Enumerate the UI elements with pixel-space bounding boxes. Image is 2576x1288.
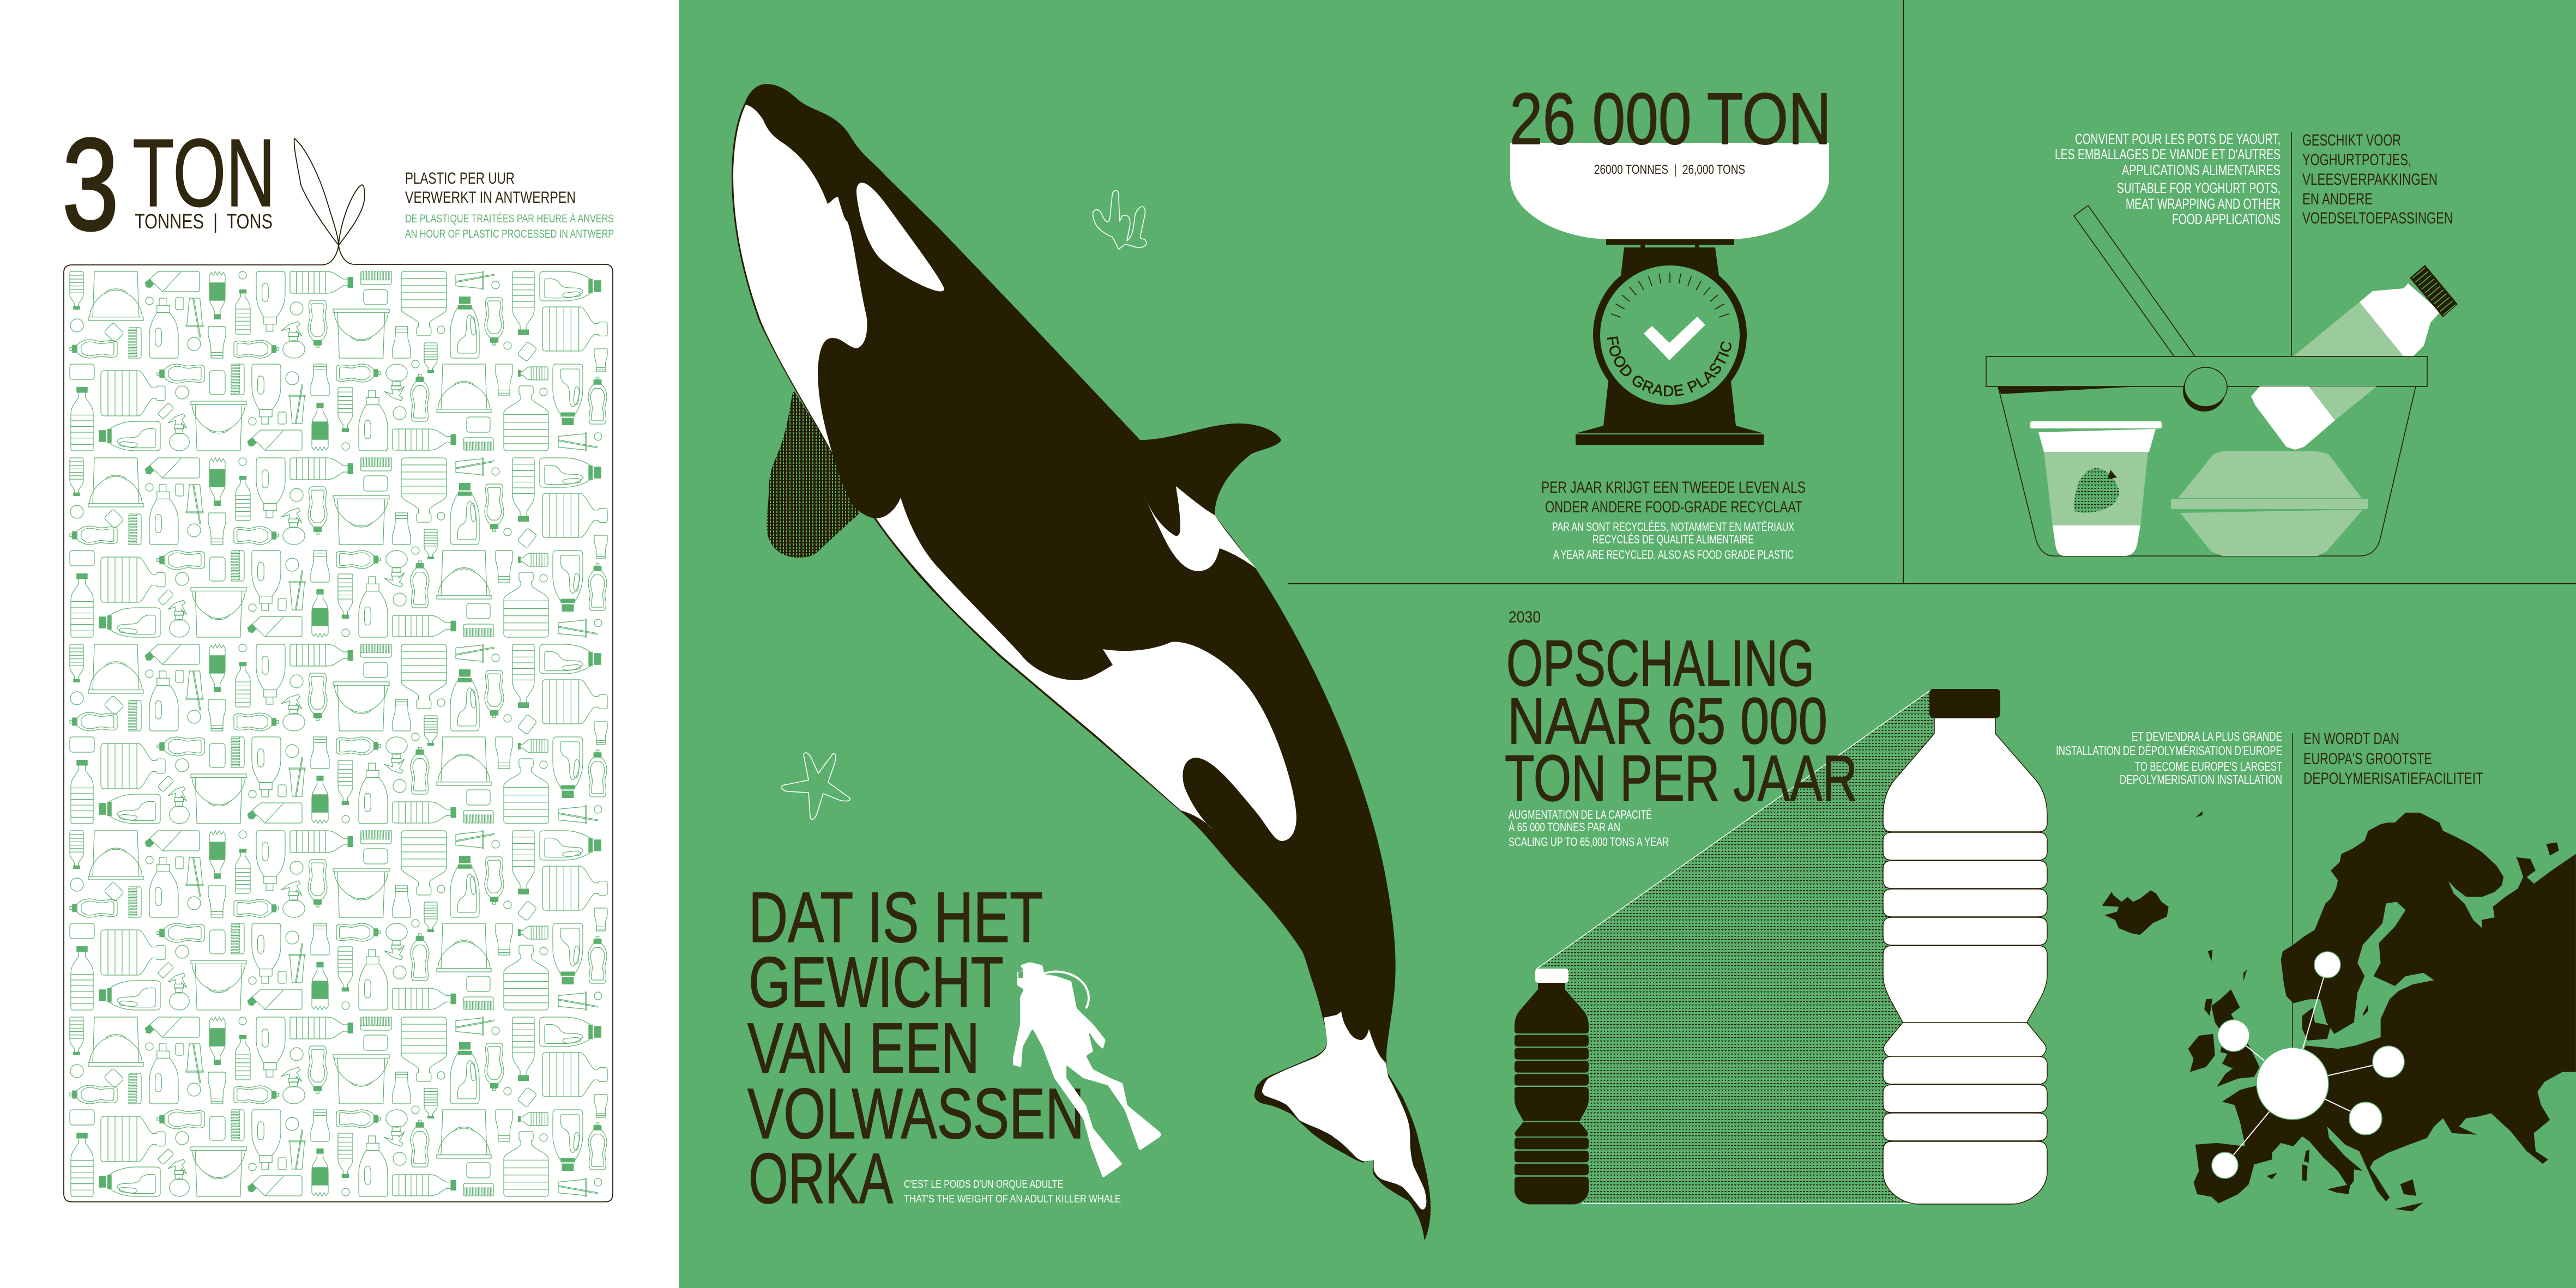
text: geschikt voor: VLEESVERPAKKINGEN bbox=[2302, 171, 2438, 189]
panel: 3 ton plastic per hour bbox=[0, 0, 679, 1288]
text: french and english scale up bbox=[1509, 808, 1669, 849]
text: en wordt dan: EN WORDT DAN bbox=[2303, 730, 2399, 748]
dial bbox=[1600, 265, 1740, 405]
text: geschikt voor: VOEDSELTOEPASSINGEN bbox=[2302, 209, 2453, 227]
icon: diver bbox=[1013, 962, 1161, 1178]
heading: dat is het gewicht: VOLWASSEN bbox=[747, 1073, 1084, 1153]
white jaw patch bbox=[733, 105, 867, 452]
heading: plastic per uur bbox=[405, 170, 576, 207]
big number 3 ton: TON bbox=[132, 119, 275, 227]
heading: opschaling: OPSCHALING bbox=[1506, 627, 1814, 700]
icon: check mark bbox=[1644, 317, 1705, 360]
caption french and english: C'EST LE POIDS D'UN ORQUE ADULTE bbox=[904, 1178, 1063, 1190]
icon: small bottle bbox=[1514, 969, 1589, 1205]
subtext french and english: AN HOUR OF PLASTIC PROCESSED IN ANTWERP bbox=[405, 228, 614, 240]
text: french and english: ET DEVIENDRA LA PLUS GRANDE bbox=[2132, 729, 2282, 743]
big number 3 ton: TONNES | TONS bbox=[135, 210, 273, 233]
text: geschikt voor: YOGHURTPOTJES, bbox=[2302, 151, 2411, 169]
text: french and english bbox=[2056, 729, 2282, 787]
caption french and english bbox=[904, 1178, 1121, 1205]
big number 3 ton bbox=[62, 111, 275, 257]
heading: 26 000 ton: 26 000 TON bbox=[1510, 78, 1831, 160]
text: french and english: MEAT WRAPPING AND OTHER bbox=[2126, 196, 2281, 212]
heading: opschaling bbox=[1505, 627, 1857, 815]
icon: pectoral fin hatched bbox=[767, 390, 859, 558]
scale body bbox=[1576, 239, 1764, 445]
text: french and english: INSTALLATION DE DÉPOLYMÉRISATION D'EUROPE bbox=[2056, 743, 2282, 758]
icon: large bottle bbox=[1883, 689, 2047, 1204]
text: per jaar: ONDER ANDERE FOOD-GRADE RECYCLAAT bbox=[1545, 498, 1802, 516]
panel: europe map bbox=[2056, 729, 2576, 1211]
map of europe bbox=[2102, 811, 2576, 1211]
curved label food grade plastic: FOOD GRADE PLASTIC bbox=[1607, 336, 1732, 397]
icon: coral outline bbox=[1093, 191, 1147, 249]
heading: opschaling: NAAR 65 000 bbox=[1507, 685, 1827, 758]
text: geschikt voor: GESCHIKT VOOR bbox=[2302, 131, 2401, 149]
location dots bbox=[2212, 952, 2404, 1178]
heading: dat is het gewicht: VAN EEN bbox=[747, 1008, 980, 1088]
text: french and english: CONVIENT POUR LES POTS DE YAOURT, bbox=[2075, 131, 2281, 147]
icon: milk bottle top bbox=[2293, 265, 2458, 356]
panel: food grade scale bbox=[1510, 78, 1831, 561]
caption french and english: THAT'S THE WEIGHT OF AN ADULT KILLER WHALE bbox=[904, 1193, 1121, 1205]
text: french and english: APPLICATIONS ALIMENTAIRES bbox=[2122, 162, 2281, 178]
text: per jaar: PER JAAR KRIJGT EEN TWEEDE LEVEN ALS bbox=[1541, 479, 1806, 497]
white tail fluke bbox=[1262, 1011, 1426, 1210]
text: french and english scale up: À 65 000 TONNES PAR AN bbox=[1509, 820, 1620, 834]
white flank patch bbox=[1141, 486, 1256, 571]
text: french and english: TO BECOME EUROPE'S LARGEST bbox=[2135, 759, 2282, 773]
text: per jaar bbox=[1541, 479, 1806, 516]
text: french and english recycled: PAR AN SONT RECYCLÉES, NOTAMMENT EN MATÉRIAUX bbox=[1552, 520, 1794, 534]
panel: basket of food applications bbox=[1986, 131, 2458, 556]
vertical rule bbox=[2292, 733, 2293, 1049]
bowl label: 26000 TONNES | 26,000 TONS bbox=[1594, 162, 1745, 177]
white belly patch bbox=[876, 498, 1296, 841]
heading: dat is het gewicht: GEWICHT bbox=[749, 942, 1004, 1022]
heading: plastic per uur: PLASTIC PER UUR bbox=[405, 170, 515, 188]
icon: takeaway box bbox=[2171, 451, 2368, 556]
icon: milk bottle bottom bbox=[2251, 386, 2376, 450]
subtext french and english: DE PLASTIQUE TRAITÉES PAR HEURE À ANVERS bbox=[405, 213, 614, 225]
card outline with leaf sprout bbox=[64, 138, 613, 1202]
text: french and english scale up: SCALING UP TO 65,000 TONS A YEAR bbox=[1509, 835, 1669, 849]
text: french and english recycled: RECYCLÉS DE QUALITÉ ALIMENTAIRE bbox=[1592, 533, 1754, 546]
icon: basket bbox=[1986, 205, 2427, 556]
heading: dat is het gewicht: ORKA bbox=[749, 1138, 893, 1218]
text: french and english: SUITABLE FOR YOGHURT POTS, bbox=[2117, 180, 2281, 196]
text: en wordt dan bbox=[2303, 730, 2483, 788]
text: en wordt dan: DEPOLYMERISATIEFACILITEIT bbox=[2303, 770, 2483, 788]
heading: dat is het gewicht: DAT IS HET bbox=[749, 877, 1043, 957]
big number 3 ton: 3 bbox=[62, 111, 119, 257]
text: french and english: FOOD APPLICATIONS bbox=[2172, 211, 2281, 227]
vertical rule bbox=[2291, 132, 2292, 356]
text: french and english recycled bbox=[1552, 520, 1794, 561]
text: french and english scale up: AUGMENTATION DE LA CAPACITÉ bbox=[1509, 808, 1652, 821]
text: geschikt voor bbox=[2302, 131, 2453, 227]
bowl of scale bbox=[1510, 143, 1829, 239]
illustration: orca bbox=[732, 84, 1431, 1241]
divider lines bbox=[1288, 0, 2576, 584]
icon: yoghurt pot bbox=[2030, 421, 2162, 556]
heading: dat is het gewicht bbox=[747, 877, 1084, 1218]
heading: opschaling: TON PER JAAR bbox=[1505, 742, 1857, 815]
text: french and english recycled: A YEAR ARE RECYCLED, ALSO AS FOOD GRADE PLASTIC bbox=[1553, 548, 1794, 561]
text: geschikt voor: EN ANDERE bbox=[2302, 190, 2373, 208]
white eye patch bbox=[856, 183, 944, 291]
panel: scaling up bottles bbox=[1505, 608, 2047, 1205]
text: french and english: DEPOLYMERISATION INSTALLATION bbox=[2120, 772, 2282, 787]
icon: strawberry bbox=[2074, 468, 2119, 513]
text: french and english bbox=[2055, 131, 2281, 227]
pattern of plastic packaging icons bbox=[70, 271, 607, 1196]
year label: 2030 bbox=[1509, 608, 1541, 626]
text: en wordt dan: EUROPA'S GROOTSTE bbox=[2303, 750, 2432, 768]
icon: starfish outline bbox=[782, 753, 850, 819]
subtext french and english bbox=[405, 213, 614, 240]
dial ticks bbox=[1611, 273, 1729, 317]
dotted projection area bbox=[1537, 691, 1941, 1204]
text: french and english: LES EMBALLAGES DE VIANDE ET D'AUTRES bbox=[2055, 146, 2281, 162]
connector lines bbox=[2225, 965, 2388, 1165]
heading: plastic per uur: VERWERKT IN ANTWERPEN bbox=[405, 189, 576, 207]
